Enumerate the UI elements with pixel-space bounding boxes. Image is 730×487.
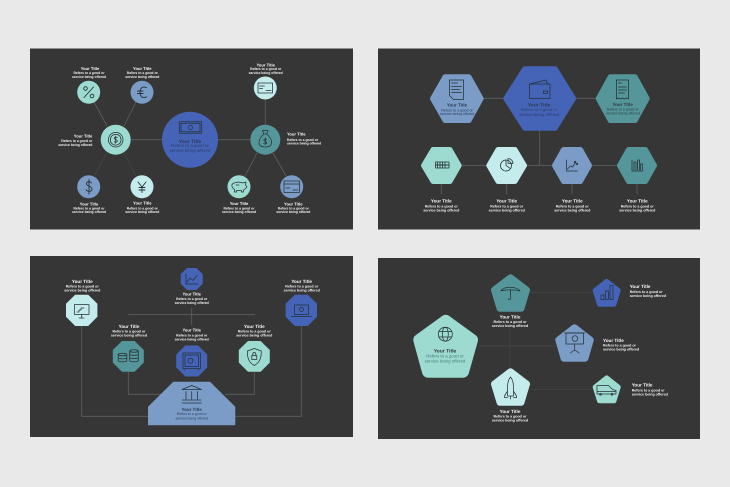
icon: money bag [259, 130, 272, 147]
pentagon: delivery van: service being offered [632, 392, 668, 396]
bank base shape: Refers to a good or [177, 412, 208, 416]
large pentagon: globe: Refers to a good or [426, 353, 464, 358]
right hexagon: receipt: Your Title [613, 102, 633, 107]
node: percent [72, 66, 106, 104]
pentagon: presentation board: service being offered [603, 348, 639, 352]
node: bank card top: service being offered [249, 71, 283, 75]
pentagon: umbrella [492, 278, 528, 328]
icon: safe box [183, 353, 200, 370]
connector lines: hexagon tree [441, 98, 637, 194]
center node: money: Your Title [179, 139, 202, 145]
node: euro: Your Title [133, 66, 152, 71]
icon: banknote [179, 122, 202, 133]
pentagon: delivery van: Refers to a good or [632, 388, 665, 392]
node: credit card [276, 175, 310, 214]
octagon: top growth chart: service being offered [175, 301, 209, 305]
panel: radial circle network [30, 48, 353, 230]
hexagon: bar chart [619, 150, 655, 212]
hexagon: bar chart: service being offered [619, 208, 655, 212]
icon: coin stacks [118, 350, 138, 362]
icon: id card [258, 83, 272, 93]
hexagon: bar chart: Your Title [627, 199, 648, 204]
pentagon: presentation board: Refers to a good or [603, 344, 637, 348]
pentagon: delivery van [595, 378, 668, 401]
hexagon: growth chart [554, 150, 590, 212]
node: euro [125, 66, 159, 104]
right hub: money bag [250, 125, 321, 155]
hexagon: pie chart [489, 150, 525, 212]
bank base shape: Your Title [182, 407, 202, 412]
node: yen: Refers to a good or [127, 206, 159, 210]
node: dollar: service being offered [72, 210, 106, 214]
hexagon: coins: Your Title [431, 199, 452, 204]
octagon: coin stacks: Refers to a good or [113, 329, 146, 333]
pentagon: rocket: service being offered [492, 418, 528, 422]
icon: coin [108, 132, 123, 147]
octagon: safe: Refers to a good or [176, 334, 208, 338]
center hexagon: wallet: Your Title [528, 102, 551, 108]
octagon: monitor: service being offered [64, 288, 100, 292]
center node: money: service being offered [170, 148, 211, 153]
node: piggy bank [222, 175, 256, 214]
icon: pie chart [500, 158, 513, 171]
node: piggy bank: Your Title [230, 201, 249, 206]
pentagon: presentation board [559, 328, 639, 358]
pentagon: umbrella: Your Title [500, 314, 521, 320]
hexagon: pie chart: Your Title [496, 199, 518, 204]
left hub: coin: service being offered [58, 143, 92, 147]
node: dollar [72, 175, 106, 214]
octagon: coin stacks [111, 324, 147, 372]
pentagon: umbrella: service being offered [492, 324, 528, 328]
hexagon: coins [423, 150, 459, 212]
pentagon: rocket [492, 372, 528, 422]
node: bank card top: Your Title [256, 62, 276, 67]
octagon: top growth chart: Your Title [182, 291, 202, 296]
pentagon: dark blue bar chart [595, 281, 666, 304]
large pentagon: globe: Your Title [434, 349, 457, 355]
icon: percent sign [84, 87, 94, 98]
pentagon: presentation board: Your Title [603, 338, 624, 343]
hexagon: coins: service being offered [423, 208, 459, 212]
center hexagon: wallet [506, 69, 573, 128]
right hub: money bag: Refers to a good or [287, 138, 319, 142]
bank base shape [148, 382, 235, 425]
node: percent: Refers to a good or [73, 71, 105, 75]
pentagon: delivery van: Your Title [632, 382, 653, 388]
bank base shape: service being offered [175, 416, 208, 420]
node: bank card top [249, 62, 283, 100]
icon: stacked coins [436, 162, 449, 168]
hexagon: growth chart: Refers to a good or [556, 204, 589, 208]
octagon: safe: Your Title [182, 328, 202, 333]
node: yen: service being offered [125, 210, 159, 214]
octagon: laptop: Your Title [291, 279, 313, 284]
icon: receipt [616, 80, 628, 99]
center hexagon: wallet: Refers to a good or [521, 107, 558, 112]
icon: shield with lock [247, 348, 261, 366]
panel: hexagon tree [378, 48, 700, 230]
center hexagon: wallet: service being offered [519, 112, 560, 117]
pentagon: umbrella: Refers to a good or [494, 320, 527, 324]
left hexagon: invoice: service being offered [440, 112, 474, 116]
hexagon: pie chart: service being offered [489, 208, 525, 212]
icon: credit card [284, 181, 300, 192]
node: credit card: Your Title [284, 201, 303, 206]
octagon: shield lock: Your Title [244, 324, 265, 329]
icon: growth chart [186, 274, 198, 284]
octagon: laptop: service being offered [284, 288, 320, 292]
octagon: monitor [64, 279, 100, 326]
node: piggy bank: service being offered [222, 210, 256, 214]
octagon: shield lock [236, 324, 272, 372]
center node: money: Refers to a good or [171, 143, 209, 148]
octagon: shield lock: service being offered [236, 334, 272, 338]
left hexagon: invoice: Refers to a good or [441, 108, 474, 112]
icon: presentation board [564, 333, 585, 353]
node: euro: Refers to a good or [127, 71, 159, 75]
connector lines: pentagon flow [478, 292, 593, 389]
node: percent: service being offered [72, 75, 106, 79]
node: piggy bank: Refers to a good or [223, 206, 255, 210]
left hub: coin: Refers to a good or [61, 139, 93, 143]
icon: desktop monitor [74, 304, 89, 318]
octagon: laptop: Refers to a good or [285, 284, 319, 288]
node: yen [125, 175, 159, 214]
pentagon: rocket: Refers to a good or [494, 414, 527, 418]
octagon: monitor: Your Title [72, 279, 93, 284]
right hexagon: receipt: Refers to a good or [607, 107, 639, 111]
node: yen: Your Title [133, 201, 152, 206]
icon: laptop [292, 305, 312, 316]
octagon: top growth chart [175, 268, 209, 305]
connector lines: octagon hierarchy [82, 308, 301, 416]
pentagon: rocket: Your Title [500, 409, 521, 414]
icon: dollar sign [86, 180, 92, 194]
node: dollar: Refers to a good or [73, 206, 105, 210]
right hub: money bag: Your Title [287, 132, 306, 137]
panel: octagon hierarchy [30, 256, 353, 437]
hexagon: bar chart: Refers to a good or [621, 204, 654, 208]
large pentagon: globe: service being offered [425, 358, 466, 363]
hexagon: pie chart: Refers to a good or [490, 204, 524, 208]
node: bank card top: Refers to a good or [250, 67, 282, 71]
left hub: coin: Your Title [74, 133, 93, 138]
icon: document [450, 80, 464, 100]
icon: umbrella [501, 287, 520, 300]
octagon: shield lock: Refers to a good or [238, 329, 271, 333]
icon: delivery van [597, 386, 616, 395]
icon: bars [601, 286, 613, 300]
icon: bar chart [632, 160, 643, 171]
right hexagon: receipt: service being offered [606, 111, 640, 115]
octagon: laptop [284, 279, 320, 326]
panel: pentagon flow [378, 258, 700, 439]
large pentagon: globe [419, 321, 472, 372]
left hexagon: invoice [432, 77, 481, 120]
node: credit card: service being offered [276, 210, 310, 214]
pentagon: dark blue bar chart: service being offered [630, 294, 666, 298]
icon: piggy bank [232, 182, 247, 192]
icon: line chart [566, 160, 578, 171]
icon: wallet [530, 80, 550, 98]
center node: money [162, 112, 218, 168]
connector lines: circle network [94, 100, 286, 176]
node: euro: service being offered [125, 75, 159, 79]
icon: bank building [182, 386, 202, 403]
octagon: monitor: Refers to a good or [66, 284, 99, 288]
pentagon: dark blue bar chart: Your Title [630, 284, 651, 289]
octagon: safe [175, 328, 209, 376]
icon: yen sign [138, 182, 146, 192]
octagon: top growth chart: Refers to a good or [176, 297, 208, 301]
node: percent: Your Title [81, 66, 100, 71]
right hub: money bag: service being offered [287, 142, 321, 146]
octagon: coin stacks: service being offered [111, 334, 147, 338]
icon: euro sign [138, 87, 146, 98]
pentagon: dark blue bar chart: Refers to a good or [630, 290, 663, 294]
left hub: coin [58, 125, 131, 155]
left hexagon: invoice: Your Title [447, 103, 468, 108]
hexagon: growth chart: service being offered [554, 208, 590, 212]
hexagon: growth chart: Your Title [562, 199, 583, 204]
icon: rocket [504, 377, 516, 399]
octagon: safe: service being offered [175, 338, 209, 342]
right hexagon: receipt [598, 77, 647, 120]
hexagon: coins: Refers to a good or [425, 204, 458, 208]
icon: globe [438, 327, 452, 341]
node: dollar: Your Title [80, 201, 99, 206]
octagon: coin stacks: Your Title [119, 324, 140, 329]
node: credit card: Refers to a good or [278, 206, 310, 210]
